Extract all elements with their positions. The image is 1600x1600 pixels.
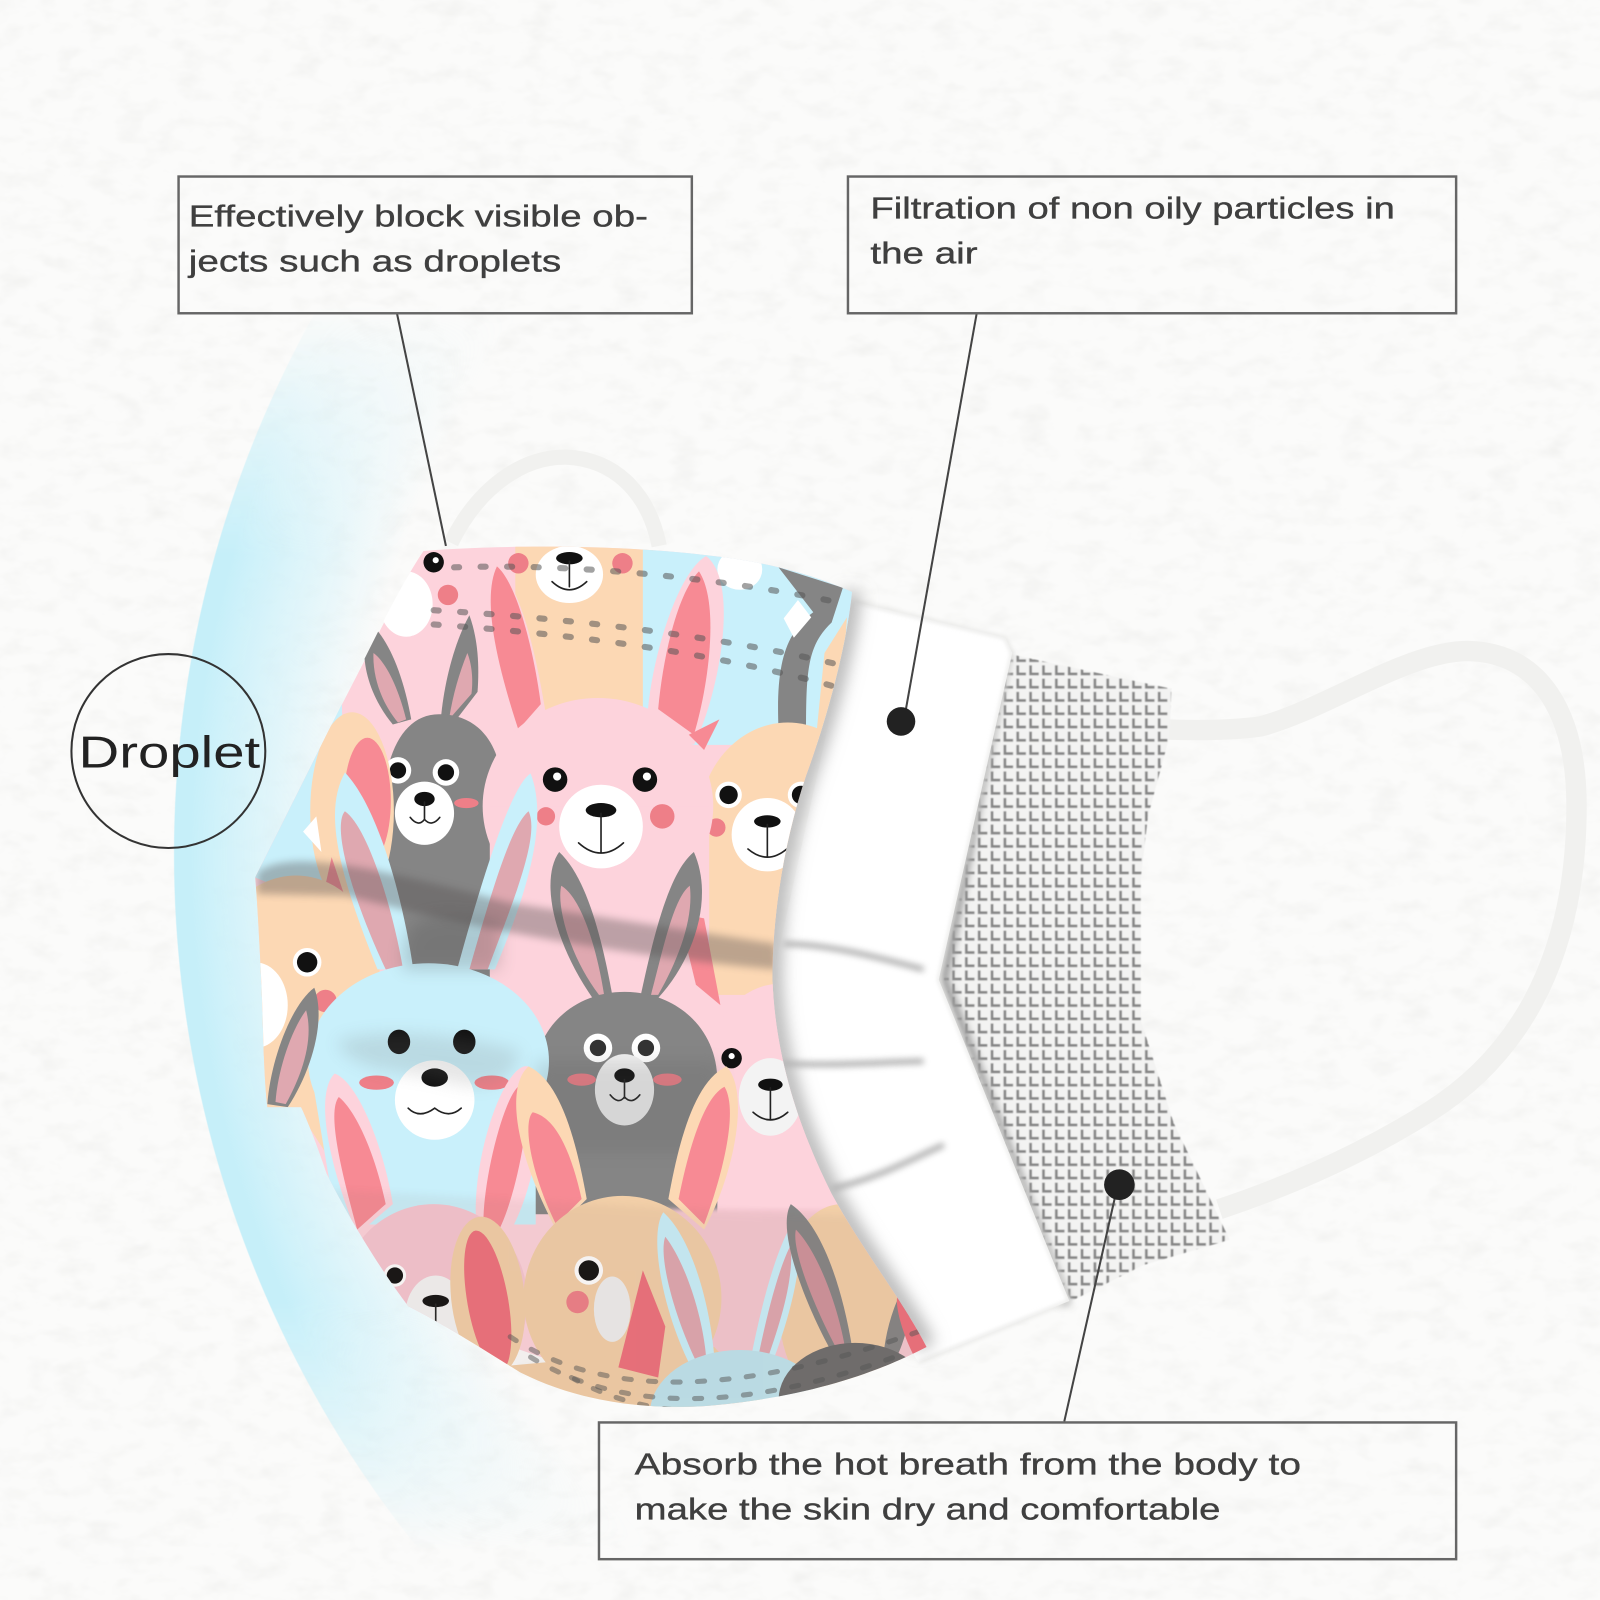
callout box: block droplets bbox=[179, 177, 692, 313]
inner mesh layer bbox=[944, 653, 1230, 1301]
callout box: absorb breath: make the skin dry and comfortable bbox=[635, 1492, 1220, 1526]
callout box: block droplets: Effectively block visible ob- bbox=[189, 200, 648, 234]
far-left peach bear bbox=[256, 876, 380, 1151]
blue droplet arc bbox=[174, 342, 496, 1516]
bottom row: peach ear bbox=[450, 1216, 525, 1366]
callout box: filtration bbox=[848, 177, 1456, 313]
bottom row: lower right pink area bbox=[666, 1206, 913, 1362]
white middle layer bbox=[772, 592, 1069, 1362]
droplet label circle bbox=[71, 654, 265, 848]
gray ear, far left bbox=[267, 988, 319, 1107]
lower fold tint bbox=[336, 1192, 912, 1407]
top row: pink bear face bbox=[380, 552, 458, 637]
left ear loop bbox=[451, 457, 659, 546]
bottom row: pink rabbit bbox=[325, 1066, 532, 1348]
callout box: block droplets: jects such as droplets bbox=[188, 244, 561, 278]
bottom row: blue rabbit bbox=[650, 1212, 820, 1407]
droplet label circle: Droplet bbox=[79, 726, 261, 777]
blue rabbit, centre left bbox=[308, 772, 549, 1224]
bottom row: peach head, right bbox=[782, 1204, 898, 1390]
right ear loop bbox=[1168, 651, 1577, 1209]
bottom row: peach rabbit bbox=[510, 1066, 762, 1407]
fabric fold: lower bbox=[832, 1145, 944, 1189]
callout box: filtration: the air bbox=[870, 236, 978, 270]
bottom stitching bbox=[510, 1332, 918, 1411]
top row: peach bear bbox=[508, 546, 653, 714]
callout line: breath with dot bbox=[1064, 1169, 1135, 1421]
front mask with rabbit pattern bbox=[255, 546, 926, 1407]
callout box: absorb breath: Absorb the hot breath from the body to bbox=[635, 1447, 1301, 1481]
pink rabbit, right middle bbox=[721, 984, 838, 1204]
bottom row: gray rabbit bbox=[778, 1204, 926, 1396]
callout box: absorb breath bbox=[599, 1422, 1456, 1559]
big pink rabbit bbox=[482, 556, 822, 1005]
callout line: droplets bbox=[397, 313, 446, 546]
fold shadow across the mask bbox=[257, 862, 778, 1153]
top row: blue rabbit with gray ear bbox=[643, 546, 857, 745]
fabric fold: upper bbox=[784, 944, 923, 969]
gray rabbit, upper left bbox=[364, 615, 502, 980]
fabric fold: middle bbox=[781, 1061, 923, 1064]
top stitching bbox=[434, 567, 847, 686]
callout box: filtration: Filtration of non oily particles in bbox=[870, 191, 1395, 225]
front edge shadow bbox=[772, 592, 927, 1347]
peach ear and blue edge, left bbox=[255, 704, 394, 918]
gray rabbit, centre bbox=[534, 852, 717, 1214]
peach rabbit, right bbox=[709, 722, 822, 995]
callout line: filtration with dot bbox=[887, 314, 977, 736]
